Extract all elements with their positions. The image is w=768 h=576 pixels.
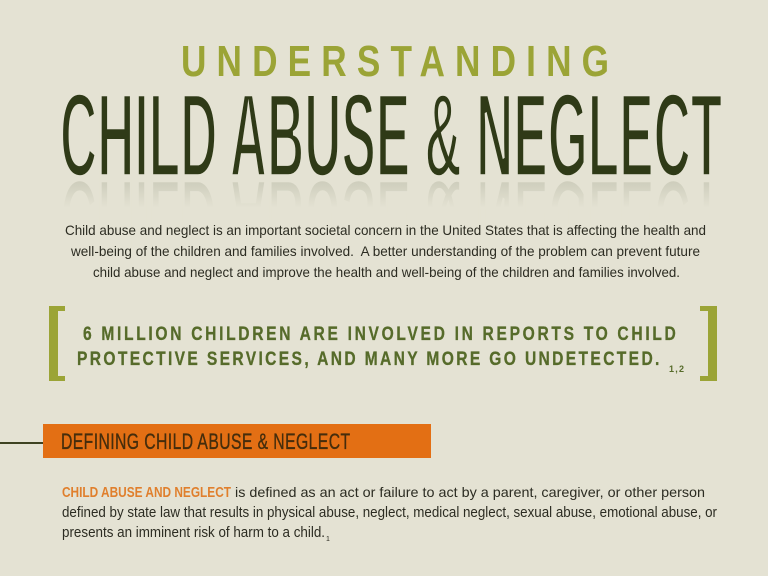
heading: understanding: UNDERSTANDING <box>181 37 609 86</box>
callout text: PROTECTIVE SERVICES, AND MANY MORE GO UNDETECTED. <box>77 347 659 369</box>
intro paragraph: well-being of the children and families involved. A better understanding of the problem can prevent future <box>70 243 700 259</box>
intro paragraph <box>65 222 706 280</box>
callout text: 1,2 <box>669 364 684 374</box>
banner text: DEFINING CHILD ABUSE & NEGLECT <box>61 429 350 455</box>
intro paragraph: Child abuse and neglect is an important societal concern in the United States that is affecting the health and <box>65 222 706 238</box>
connector line <box>0 442 44 444</box>
callout: 6 million children <box>49 306 717 381</box>
definition paragraph <box>62 484 717 543</box>
icon: left bracket <box>49 306 65 381</box>
title reflection: CHILD ABUSE & NEGLECT <box>60 154 722 287</box>
definition paragraph: presents an imminent risk of harm to a child. <box>62 525 325 541</box>
icon: right bracket <box>700 306 717 381</box>
definition paragraph: is defined as an act or failure to act by a parent, caregiver, or other person <box>235 484 705 500</box>
section header: defining child abuse and neglect <box>0 424 431 458</box>
definition paragraph: CHILD ABUSE AND NEGLECT <box>62 485 231 501</box>
callout text <box>77 322 684 374</box>
intro paragraph: child abuse and neglect and improve the health and well-being of the children and families involved. <box>93 264 680 280</box>
definition paragraph: defined by state law that results in physical abuse, neglect, medical neglect, sexual abuse, emotional abuse, or <box>62 505 717 521</box>
callout text: 6 MILLION CHILDREN ARE INVOLVED IN REPORTS TO CHILD <box>83 322 676 344</box>
heading: child abuse and neglect: CHILD ABUSE & NEGLECT <box>60 70 722 202</box>
orange banner <box>43 424 431 458</box>
title block <box>60 37 722 287</box>
definition paragraph: 1 <box>326 536 330 543</box>
